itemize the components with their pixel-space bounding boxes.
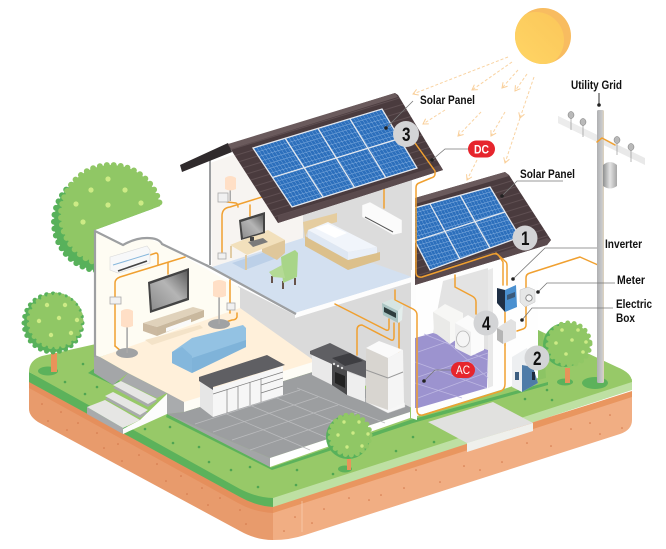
control panel box	[382, 299, 403, 323]
label: electric box: Box	[616, 311, 635, 325]
insulators	[568, 112, 634, 150]
sun rays	[413, 57, 534, 180]
second solar array	[415, 186, 516, 271]
living room wall	[95, 230, 240, 357]
AC badge	[451, 362, 475, 378]
purple floor	[415, 333, 488, 408]
patio tiles	[167, 371, 410, 467]
sun	[515, 8, 571, 64]
DC badge: DC	[474, 142, 489, 156]
left tree	[24, 294, 82, 376]
label: solar panel upper: Solar Panel	[420, 93, 475, 107]
crossarm	[558, 116, 645, 165]
wall outline	[95, 231, 296, 357]
television	[148, 268, 189, 313]
wall sockets lower room	[110, 297, 235, 310]
refrigerator	[366, 341, 405, 413]
inverter	[497, 285, 517, 312]
second roof	[400, 172, 551, 285]
floor lamp left	[116, 309, 138, 358]
desk	[230, 230, 285, 270]
bed	[303, 213, 380, 270]
number badge 1: 1	[521, 229, 530, 250]
rug	[232, 252, 277, 270]
transformer	[603, 162, 617, 188]
label: utility grid: Utility Grid	[571, 78, 622, 92]
light grass edge	[273, 379, 632, 507]
white exterior wall strip	[411, 270, 417, 420]
soil speckles	[41, 403, 623, 532]
main roof	[228, 93, 443, 223]
big background tree	[54, 165, 161, 271]
upper room back wall	[210, 130, 303, 267]
sofa	[172, 325, 246, 373]
utility pole	[558, 110, 645, 389]
bedroom sockets	[218, 193, 228, 259]
right tree	[538, 323, 590, 386]
dark grass edge	[29, 372, 273, 507]
number badge 4: 4	[482, 314, 491, 335]
wall lamp	[225, 176, 236, 201]
label: meter: Meter	[617, 273, 645, 287]
solar battery unit	[512, 348, 538, 392]
number badge 4	[474, 310, 498, 336]
bedroom furniture	[218, 176, 402, 289]
AC badge: AC	[456, 365, 470, 377]
air conditioner lower room	[110, 246, 150, 273]
patio wall	[167, 393, 184, 414]
air conditioner upper room	[362, 202, 402, 235]
meter	[520, 287, 535, 307]
dark grass strips along the house	[88, 368, 548, 470]
label: solar panel lower: Solar Panel	[520, 167, 575, 181]
label: electric box: Electric	[616, 297, 652, 311]
kitchen counter	[199, 355, 285, 417]
floor lamp right	[208, 280, 230, 329]
floor front edge	[184, 361, 316, 412]
electric box	[497, 319, 516, 344]
computer monitor	[239, 212, 268, 247]
number badge 3: 3	[402, 125, 410, 146]
chair	[269, 250, 298, 289]
front tree	[326, 415, 370, 472]
grass top	[29, 330, 632, 498]
foundation wall	[94, 350, 128, 385]
kitchen range and cabinets	[310, 343, 366, 402]
wiring: house AC circuits	[115, 188, 505, 415]
leader lines and dots	[384, 93, 615, 383]
soil right face	[273, 392, 632, 540]
living room floor	[100, 306, 316, 403]
stone steps	[87, 373, 167, 434]
wall below upper floor	[238, 280, 412, 408]
upper room side wall	[303, 170, 412, 278]
number badge 2	[524, 346, 550, 370]
laundry room	[415, 240, 538, 416]
platform: soil and grass base	[29, 330, 632, 540]
concrete walkway	[428, 402, 533, 452]
number badge 1	[512, 226, 538, 250]
wiring: DC lines from the panels	[415, 143, 598, 345]
grass speckles	[64, 363, 553, 488]
number badge 3	[393, 121, 419, 147]
washer and dryer	[433, 304, 484, 356]
DC badge	[468, 140, 495, 158]
label: inverter: Inverter	[605, 237, 642, 251]
upper floor	[212, 238, 412, 313]
dark eave	[180, 143, 232, 172]
label: electric box	[616, 297, 652, 325]
number badge 2: 2	[533, 349, 542, 370]
soil left face	[29, 378, 273, 540]
main solar array	[253, 109, 417, 207]
tv stand	[143, 307, 204, 345]
